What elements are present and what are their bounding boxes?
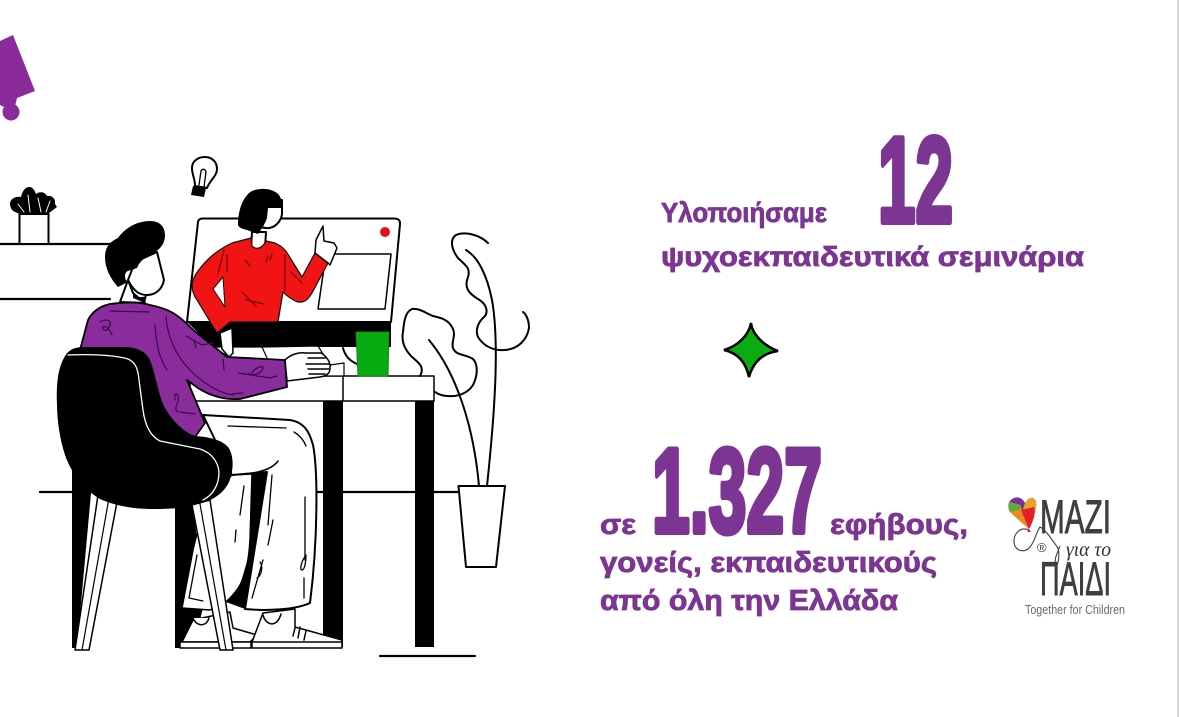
potted floor plant [402,233,529,567]
icon: green four-point star [724,323,778,377]
heading: seminars statistic [661,112,1084,272]
icon: purple puzzle piece [0,35,35,120]
man's legs and shoes [175,415,342,648]
man's head and hair [105,221,165,303]
logo script: για το: για το [1066,539,1111,561]
text: σε: σε [600,509,636,541]
logo: Μαζί για το Παιδί [1008,490,1125,617]
floor lines [40,492,475,656]
woman in red sweater on screen [192,189,337,357]
text: ψυχοεκπαιδευτικά σεμινάρια: ψυχοεκπαιδευτικά σεμινάρια [661,241,1084,272]
text: Υλοποιήσαμε: Υλοποιήσαμε [661,197,827,228]
text: από όλη την Ελλάδα: από όλη την Ελλάδα [600,585,898,617]
number: 1.327: 1.327 [652,424,822,558]
man's purple sweater [80,303,287,437]
logo registered mark: ® [1037,540,1047,555]
man's hand on desk [285,353,330,381]
illustration: two people on a video call at a desk [0,157,529,656]
logo wordmark: ΜΑΖΙ: ΜΑΖΙ [1040,490,1111,543]
logo tagline: Together for Children [1025,603,1125,617]
heading: participants statistic [600,424,968,617]
shelf with potted plant [0,187,110,299]
number: 12: 12 [878,112,953,248]
text: γονείς, εκπαιδευτικούς: γονείς, εκπαιδευτικούς [600,547,937,579]
green mug [356,332,389,376]
chair [57,347,233,650]
text: εφήβους,: εφήβους, [830,509,968,541]
computer monitor [187,218,400,364]
logo wordmark: ΠΑΙΔΙ: ΠΑΙΔΙ [1040,552,1111,605]
icon: light bulb [191,157,217,197]
logo balloon heart [1008,497,1060,566]
desk [190,346,434,647]
